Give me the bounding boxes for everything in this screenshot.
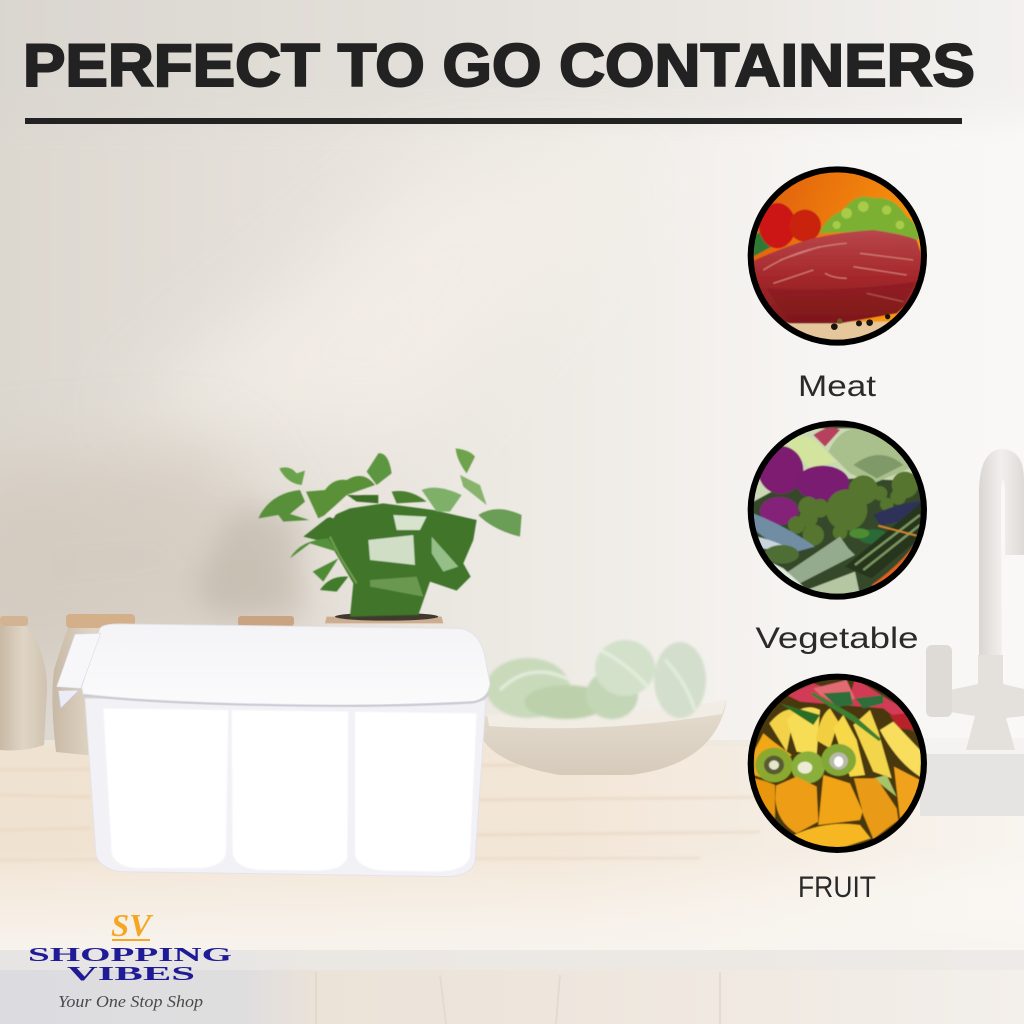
bowl of greens (483, 640, 727, 775)
lid tab (57, 633, 101, 688)
food circle: vegetable (750, 423, 927, 600)
sink and faucet (905, 449, 1024, 816)
jars (0, 614, 294, 760)
three inner cylinders (103, 708, 477, 872)
label: fruit: FRUIT (798, 871, 876, 904)
brand logo: VIBES (67, 963, 195, 985)
potted plant (258, 448, 522, 623)
food circle: meat (750, 169, 927, 347)
logo monogram: SV (111, 907, 154, 943)
logo tagline: Your One Stop Shop (58, 992, 203, 1011)
food circle: fruit (750, 677, 927, 853)
plant foliage mass (303, 503, 477, 617)
clear container product (57, 624, 490, 877)
logo wordmark: SHOPPING (28, 944, 233, 966)
container lid (82, 624, 490, 706)
title rule (25, 118, 962, 124)
title: PERFECT TO GO CONTAINERS (23, 32, 975, 99)
brand logo (28, 907, 233, 1011)
label: meat: Meat (798, 370, 877, 403)
container body (85, 698, 486, 877)
label: vegetable: Vegetable (756, 622, 918, 655)
